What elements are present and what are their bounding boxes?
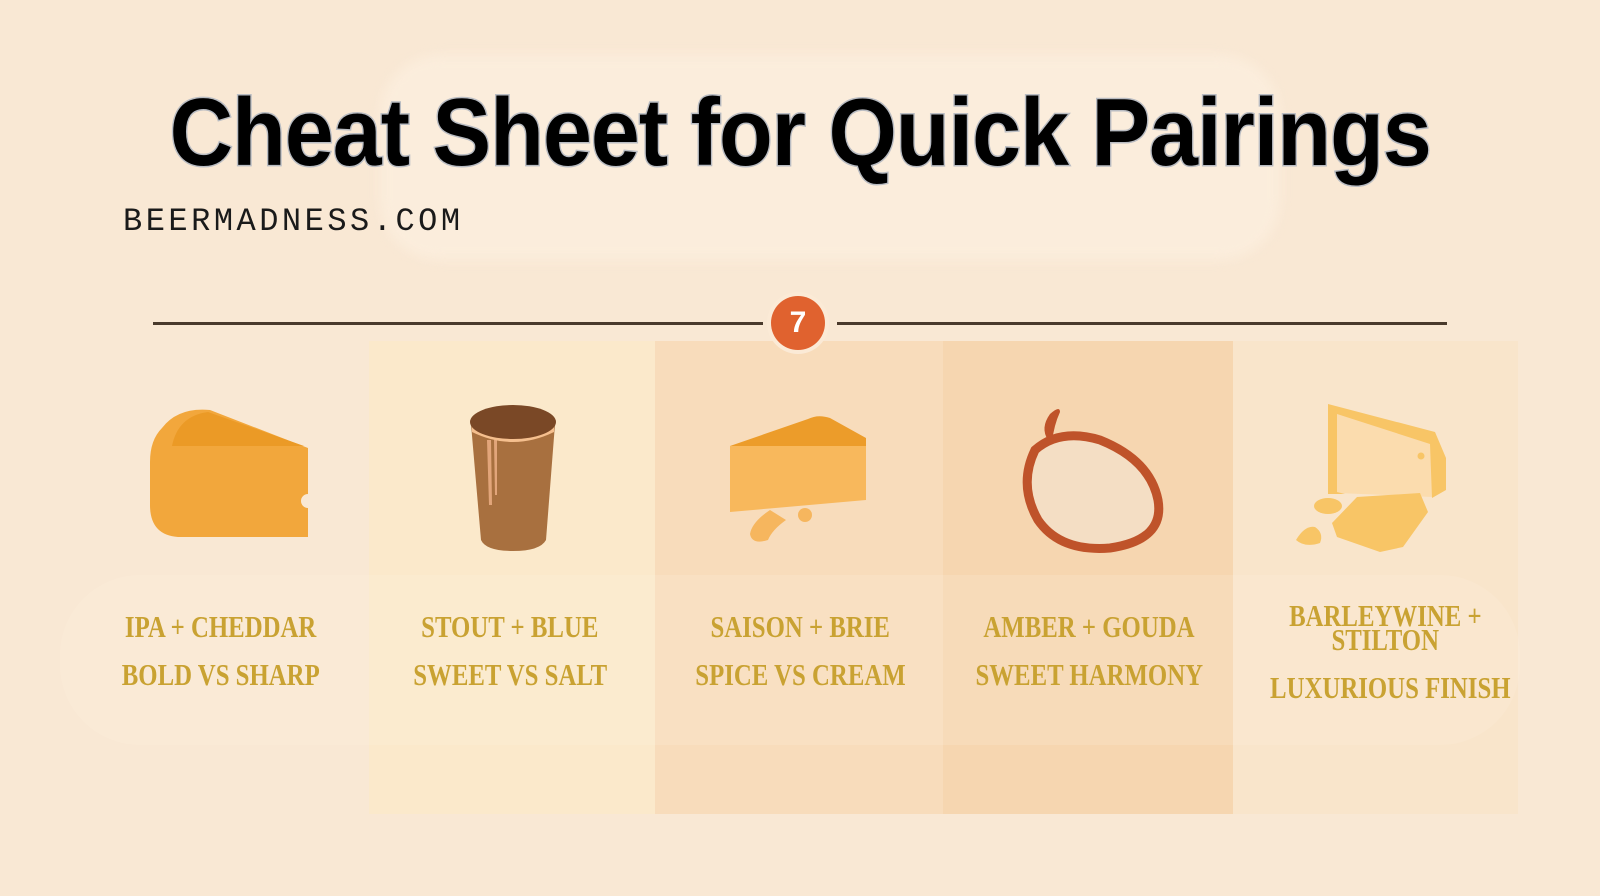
panel: Stout + Blue: SWEET VS SALT <box>413 657 607 692</box>
title: Cheat Sheet for Quick Pairings <box>169 79 1431 186</box>
panel: Barleywine + Stilton: STILTON <box>1331 622 1439 657</box>
panel: Saison + Brie: SAISON + BRIE <box>710 609 890 644</box>
panel: Amber + Gouda: SWEET HARMONY <box>975 657 1203 692</box>
panel: IPA + Cheddar: BOLD VS SHARP <box>122 657 320 692</box>
panel: Barleywine + Stilton <box>1270 598 1511 705</box>
panel: Saison + Brie: SPICE VS CREAM <box>695 657 905 692</box>
subtitle: website: BEERMADNESS.COM <box>123 203 464 240</box>
icon: stilton pieces <box>1296 404 1446 552</box>
icon: brie slice <box>730 416 866 542</box>
panel: Barleywine + Stilton: LUXURIOUS FINISH <box>1270 670 1511 705</box>
divider with number badge <box>153 296 1447 354</box>
panel: Amber + Gouda <box>975 609 1203 692</box>
background glow: title area <box>380 55 1280 260</box>
icon: gouda ring <box>1027 409 1159 548</box>
panel: IPA + Cheddar <box>122 609 320 692</box>
panel: Amber + Gouda: AMBER + GOUDA <box>983 609 1195 644</box>
panel: IPA + Cheddar: IPA + CHEDDAR <box>125 609 317 644</box>
badge: 7 <box>771 296 825 350</box>
badge: 7: 7 <box>790 306 806 339</box>
panel: Stout + Blue <box>413 609 607 692</box>
panel: Barleywine + Stilton: BARLEYWINE + <box>1289 598 1481 633</box>
panel: Stout + Blue: STOUT + BLUE <box>421 609 599 644</box>
icon: stout glass <box>470 405 556 551</box>
panel: Saison + Brie <box>695 609 905 692</box>
icon: cheddar wedge <box>150 410 308 537</box>
